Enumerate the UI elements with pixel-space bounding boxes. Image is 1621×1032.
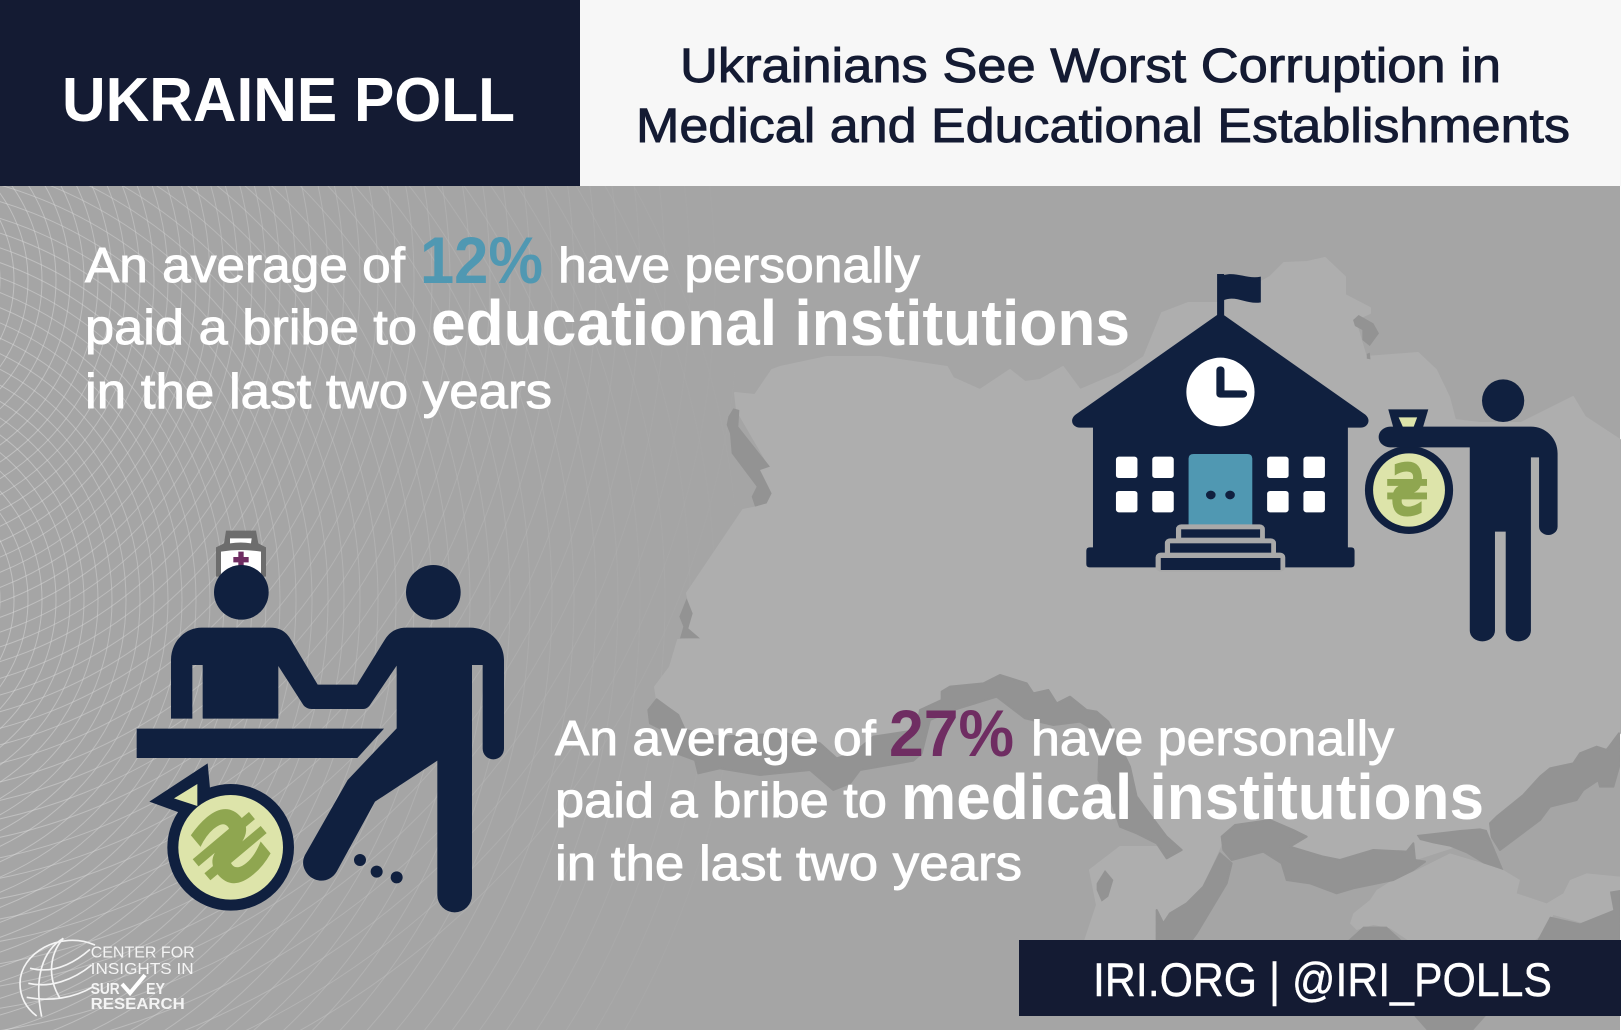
text block: medical institutions <box>555 696 1484 891</box>
map: northern lake <box>1353 315 1379 359</box>
text block: educational institutions <box>85 223 1130 419</box>
text block: educational institutions: An average of <box>85 239 405 293</box>
map: mainland <box>655 258 1620 941</box>
bag tie <box>1388 409 1428 429</box>
subtitle: Medical and Educational Establishments <box>636 100 1570 153</box>
icon: man holding money bag <box>1365 379 1558 641</box>
icon: flag <box>1217 274 1261 315</box>
text block: educational institutions: educational institutions <box>431 287 1130 359</box>
nurse head <box>214 565 269 620</box>
money bag on floor <box>149 763 210 813</box>
text block: educational institutions: have personally <box>558 239 921 293</box>
text block: medical institutions: in the last two years <box>555 837 1022 891</box>
door <box>1189 454 1252 527</box>
text block: medical institutions: An average of <box>555 712 876 766</box>
logo text: EY <box>146 981 165 998</box>
map: delta <box>1417 828 1503 870</box>
logo text: INSIGHTS IN <box>91 961 194 978</box>
subtitle <box>636 40 1570 153</box>
icon: nurse and patient passing a bribe <box>137 531 504 917</box>
title: UKRAINE POLL <box>62 66 515 135</box>
text block: medical institutions: have personally <box>1031 712 1395 766</box>
text block: medical institutions: paid a bribe to <box>555 774 887 828</box>
footer text: IRI.ORG | @IRI_POLLS <box>1093 953 1552 1006</box>
steps <box>1156 524 1285 572</box>
icon: nurse cap <box>216 531 266 577</box>
logo text: RESEARCH <box>91 996 185 1013</box>
icon: globe <box>20 938 95 1017</box>
header: subtitle panel <box>580 0 1621 186</box>
logo: Center for Insights in Survey Research <box>20 938 195 1017</box>
header: dark title panel <box>0 0 580 186</box>
logo text <box>91 945 195 1013</box>
map: river band east <box>1222 820 1425 893</box>
windows <box>1116 457 1325 512</box>
text block: educational institutions: in the last two years <box>85 365 552 419</box>
logo text: SUR <box>91 981 120 998</box>
patient head <box>406 565 461 620</box>
map: small reservoir <box>1097 870 1113 902</box>
map: Crimea and the east coast <box>1350 853 1620 942</box>
logo text: CENTER FOR <box>91 945 195 962</box>
map of Ukraine <box>648 258 1620 1030</box>
map: coast band north-east <box>1490 733 1619 850</box>
text block: medical institutions: 27% <box>889 696 1014 770</box>
desk <box>137 729 384 758</box>
subtitle: Ukrainians See Worst Corruption in <box>680 40 1501 93</box>
map: river band central <box>648 675 1182 858</box>
hryvnia sign: ₴ <box>1385 448 1429 533</box>
footer bar <box>1019 940 1621 1016</box>
nurse and patient figures <box>171 628 504 912</box>
money bag <box>1365 446 1453 534</box>
hryvnia sign rotated: ₴ <box>163 778 299 917</box>
roof and walls <box>1072 313 1369 567</box>
map: south-east coast <box>1347 890 1620 1030</box>
person <box>1482 379 1524 422</box>
falling coins dots <box>354 854 366 866</box>
icon: school building <box>1072 274 1369 572</box>
icon: check mark <box>122 975 145 993</box>
icon: clock <box>1186 358 1255 426</box>
background line pattern <box>0 186 574 1030</box>
text block: educational institutions: 12% <box>420 223 543 297</box>
map: western lake <box>727 408 772 507</box>
map: western lake lower <box>679 598 700 638</box>
text block: medical institutions: medical institutions <box>901 761 1484 833</box>
text block: educational institutions: paid a bribe to <box>85 301 417 355</box>
map: river strip south <box>1157 853 1232 940</box>
